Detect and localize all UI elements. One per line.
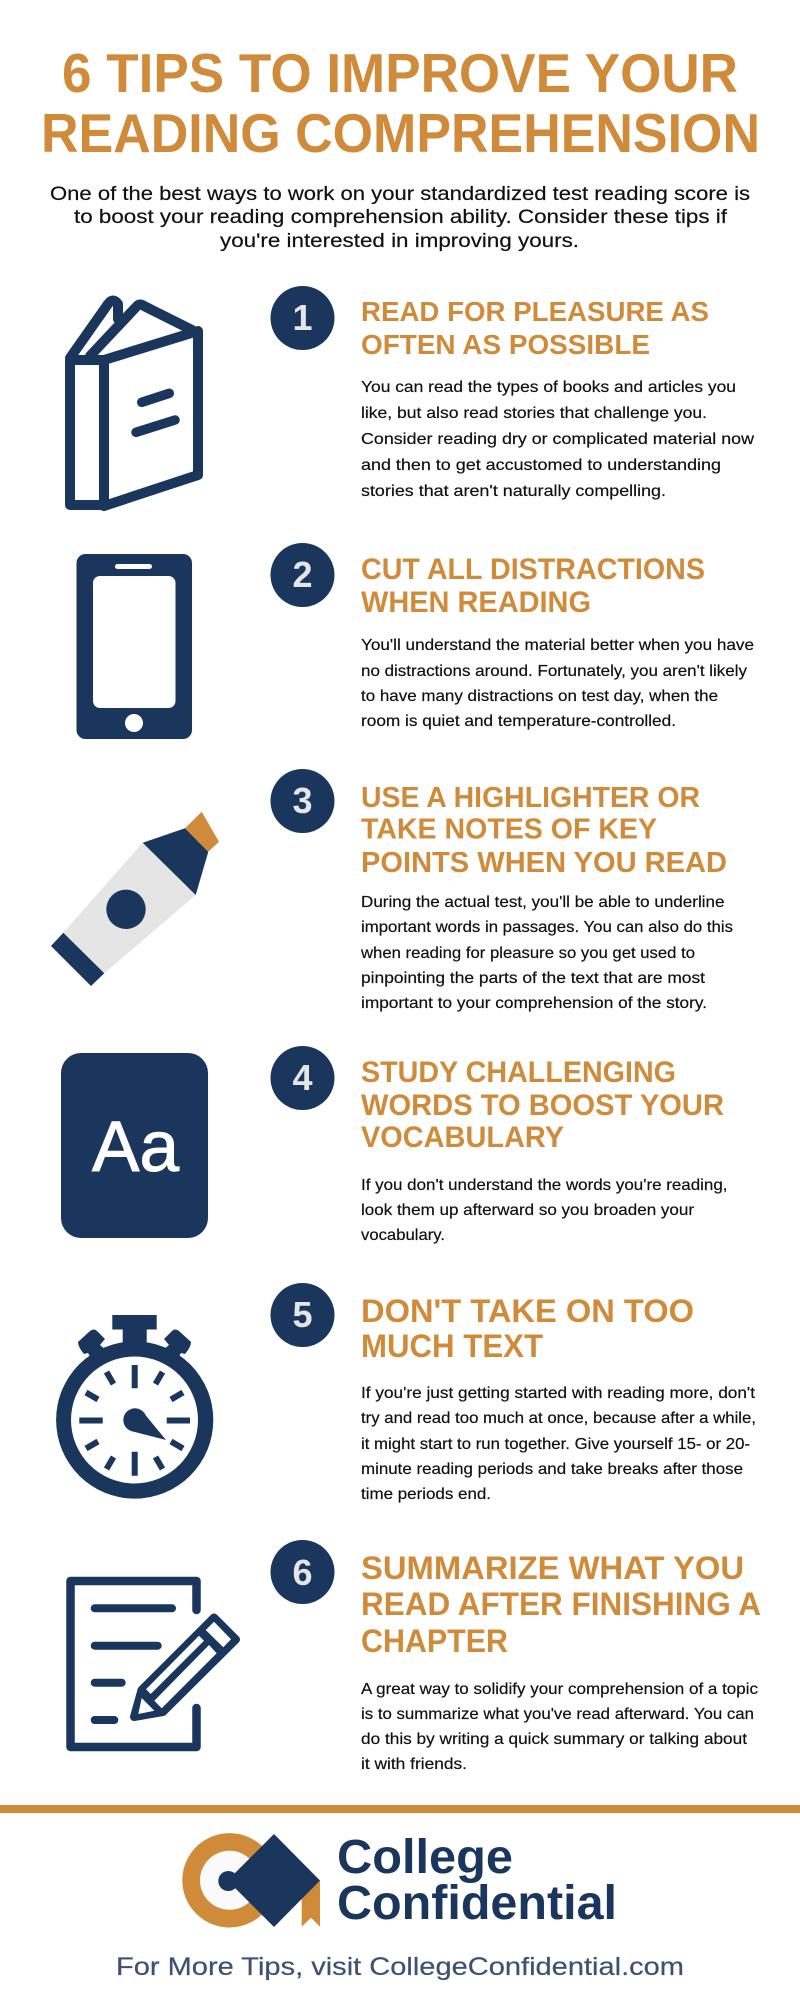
heading 4: STUDY CHALLENGING bbox=[361, 1056, 676, 1089]
heading 3: POINTS WHEN YOU READ bbox=[361, 847, 727, 879]
intro text: you're interested in improving yours. bbox=[220, 230, 579, 252]
number 5 bbox=[270, 1283, 334, 1347]
body 3: pinpointing the parts of the text that are most bbox=[361, 970, 706, 987]
intro text bbox=[50, 183, 750, 252]
title bbox=[41, 42, 760, 164]
icon: document and pencil bbox=[70, 1581, 236, 1747]
heading 6: CHAPTER bbox=[361, 1623, 508, 1659]
panel: tip 3 bbox=[51, 769, 733, 1012]
body 4: look them up afterward so you broaden your bbox=[361, 1202, 695, 1219]
heading 4: WORDS TO BOOST YOUR bbox=[361, 1089, 724, 1122]
heading 3: TAKE NOTES OF KEY bbox=[361, 814, 657, 846]
number 1: 1 bbox=[292, 297, 313, 338]
number 6: 6 bbox=[292, 1552, 313, 1593]
body 6: do this by writing a quick summary or talking about bbox=[361, 1731, 748, 1748]
body 2: room is quiet and temperature-controlled. bbox=[361, 713, 676, 730]
number 3: 3 bbox=[292, 780, 313, 821]
body 2: to have many distractions on test day, when the bbox=[361, 688, 718, 705]
heading 4 bbox=[361, 1056, 724, 1154]
heading 5: MUCH TEXT bbox=[361, 1328, 543, 1364]
number 1 bbox=[270, 286, 334, 350]
body 5 bbox=[361, 1385, 756, 1503]
number 5: 5 bbox=[292, 1294, 313, 1335]
body 5: it might start to run together. Give yourself 15- or 20- bbox=[361, 1436, 750, 1453]
number 2: 2 bbox=[292, 554, 313, 595]
body 1: like, but also read stories that challenge you. bbox=[361, 405, 707, 422]
heading 5 bbox=[361, 1293, 694, 1364]
heading 1 bbox=[361, 296, 709, 360]
icon: vocabulary card bbox=[61, 1053, 208, 1238]
body 5: try and read too much at once, because after a while, bbox=[361, 1410, 756, 1427]
body 4 bbox=[361, 1177, 728, 1244]
logo: College Confidential bbox=[182, 1831, 617, 1930]
heading 2 bbox=[361, 553, 705, 619]
title: READING COMPREHENSION bbox=[41, 102, 760, 164]
intro text: to boost your reading comprehension ability. Consider these tips if bbox=[74, 206, 728, 228]
heading 3 bbox=[361, 782, 727, 879]
body 3: important words in passages. You can also do this bbox=[361, 919, 733, 936]
icon: vocabulary card: Aa bbox=[92, 1108, 180, 1187]
body 6: A great way to solidify your comprehension of a topic bbox=[361, 1681, 758, 1698]
body 1: You can read the types of books and articles you bbox=[361, 379, 736, 396]
body 3: During the actual test, you'll be able to underline bbox=[361, 894, 725, 911]
icon: highlighter bbox=[51, 812, 219, 986]
footer divider bbox=[0, 1805, 800, 1813]
body 1: stories that aren't naturally compelling. bbox=[361, 483, 666, 500]
body 5: time periods end. bbox=[361, 1486, 491, 1503]
number 4 bbox=[270, 1046, 334, 1110]
number 6 bbox=[270, 1540, 334, 1604]
body 6: is to summarize what you've read afterward. You can bbox=[361, 1706, 754, 1723]
heading 3: USE A HIGHLIGHTER OR bbox=[361, 782, 700, 814]
icon: book bbox=[70, 300, 198, 506]
number 4: 4 bbox=[292, 1057, 313, 1098]
intro text: One of the best ways to work on your standardized test reading score is bbox=[50, 183, 750, 205]
heading 1: OFTEN AS POSSIBLE bbox=[361, 329, 650, 360]
panel: tip 2 bbox=[76, 543, 754, 739]
footer link text: For More Tips, visit CollegeConfidential.com bbox=[116, 1953, 684, 1981]
heading 6: SUMMARIZE WHAT YOU bbox=[361, 1550, 744, 1586]
panel: tip 5 bbox=[56, 1283, 756, 1503]
body 3: important to your comprehension of the story. bbox=[361, 995, 707, 1012]
heading 2: WHEN READING bbox=[361, 586, 591, 619]
body 3: when reading for pleasure so you get used to bbox=[360, 945, 695, 962]
panel: tip 1 bbox=[70, 286, 754, 506]
number 2 bbox=[270, 543, 334, 607]
heading 6 bbox=[361, 1550, 761, 1659]
body 1: Consider reading dry or complicated material now bbox=[361, 431, 754, 448]
body 5: If you're just getting started with reading more, don't bbox=[361, 1385, 756, 1402]
body 4: If you don't understand the words you're reading, bbox=[361, 1177, 728, 1194]
body 2 bbox=[361, 637, 754, 730]
heading 6: READ AFTER FINISHING A bbox=[361, 1586, 761, 1622]
body 6 bbox=[361, 1681, 758, 1773]
body 2: no distractions around. Fortunately, you aren't likely bbox=[361, 663, 747, 680]
number 3 bbox=[270, 769, 334, 833]
body 6: it with friends. bbox=[361, 1756, 467, 1773]
logo: College Confidential: College bbox=[337, 1831, 513, 1884]
heading 2: CUT ALL DISTRACTIONS bbox=[361, 553, 705, 586]
panel: tip 6 bbox=[70, 1540, 761, 1773]
heading 5: DON'T TAKE ON TOO bbox=[361, 1293, 694, 1329]
body 4: vocabulary. bbox=[361, 1227, 445, 1244]
body 2: You'll understand the material better when you have bbox=[361, 637, 754, 654]
body 1 bbox=[361, 379, 754, 500]
icon: smartphone bbox=[76, 554, 192, 739]
title: 6 TIPS TO IMPROVE YOUR bbox=[62, 42, 738, 104]
panel: tip 4 bbox=[61, 1046, 728, 1244]
body 5: minute reading periods and take breaks after those bbox=[361, 1461, 743, 1478]
logo: College Confidential: Confidential bbox=[337, 1877, 617, 1930]
body 1: and then to get accustomed to understanding bbox=[361, 457, 721, 474]
heading 4: VOCABULARY bbox=[361, 1121, 564, 1154]
heading 1: READ FOR PLEASURE AS bbox=[361, 296, 709, 327]
body 3 bbox=[360, 894, 733, 1012]
icon: stopwatch bbox=[56, 1315, 213, 1499]
